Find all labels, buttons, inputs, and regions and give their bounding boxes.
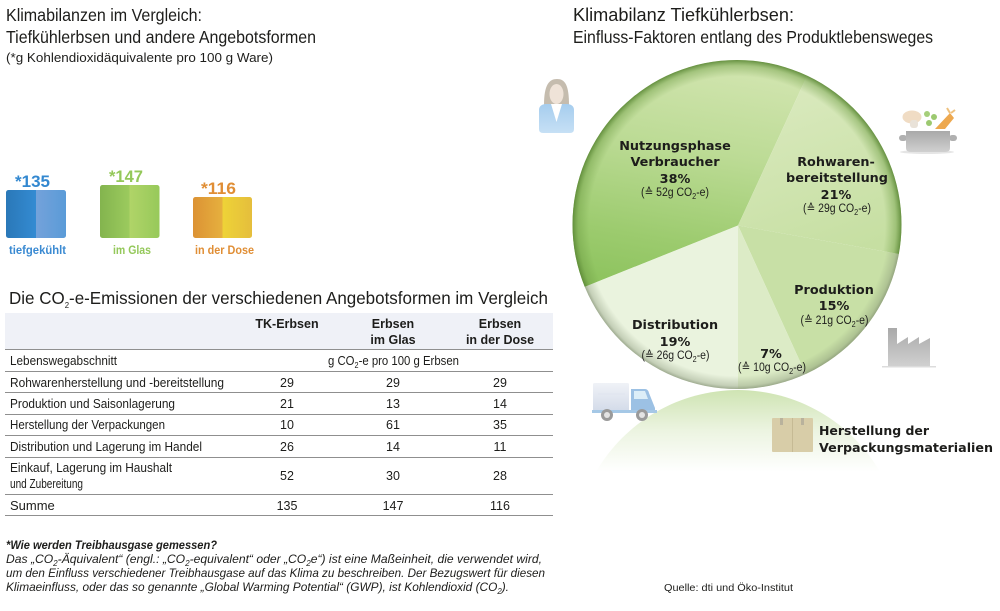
table: emissions by life cycle stage: Summe [10,498,55,513]
bar: im Glas [100,167,160,257]
icon: woman consumer [539,79,574,133]
title: right pie: Einfluss-Faktoren entlang des Produktlebensweges [573,27,933,47]
label: Verpackung 7% [738,347,806,376]
bar: tiefgekühlt: tiefgekühlt [9,243,66,257]
footnote: how greenhouse gases are measured: Das „CO [6,552,53,566]
pie chart: life cycle factors [572,60,902,389]
table: emissions by life cycle stage: und Zubereitung [10,476,83,491]
footnote: how greenhouse gases are measured: 2 [496,587,502,596]
table: emissions by life cycle stage: 26 [280,440,294,454]
slice: Produktion [738,226,899,374]
title: right pie [573,5,933,47]
label: Nutzungsphase: Nutzungsphase [619,139,731,154]
bar: tiefgekühlt: *135 [15,172,50,191]
footnote: how greenhouse gases are measured: -equivalent“ oder „CO [190,552,306,566]
table: emissions by life cycle stage: 2 [355,361,359,370]
label: Rohwarenbereitstellung [786,155,888,217]
label: Nutzungsphase: -e) [696,187,709,199]
label: Produktion: Produktion [794,283,874,298]
label: Rohwarenbereitstellung: bereitstellung [786,171,888,186]
table: emissions by life cycle stage: Produktion und Saisonlagerung [10,396,175,411]
label: Produktion [794,283,874,329]
slice: Herstellung Verpackung [738,226,806,389]
footnote: how greenhouse gases are measured [6,538,545,596]
label: Distribution: Distribution [632,318,718,333]
table: emissions by life cycle stage: Rohwarenherstellung und -bereitstellung [10,375,224,390]
label: Produktion: 15% [819,299,849,314]
table: emissions by life cycle stage: 116 [490,499,510,513]
label: Rohwarenbereitstellung: (≙ 29g CO [803,203,859,215]
label: Verpackung 7%: 7% [760,347,782,362]
table: emissions by life cycle stage: 147 [383,499,403,513]
icon: factory [882,328,936,368]
label: Herstellung der Verpackungsmaterialien: Verpackungsmaterialien [819,441,993,456]
footnote: how greenhouse gases are measured: 2 [184,559,190,568]
icon: delivery truck [592,383,657,421]
table heading: -e-Emissionen der verschiedenen Angebotsformen im Vergleich [69,288,548,308]
table: emissions by life cycle stage: 28 [493,469,507,483]
table: emissions by life cycle stage: g CO [328,354,357,368]
label: Nutzungsphase [619,139,731,201]
label: Verpackung 7%: 2 [789,367,794,376]
label: Distribution: (≙ 26g CO [642,350,698,362]
label: Rohwarenbereitstellung: 2 [854,208,859,217]
table: emissions by life cycle stage: 10 [280,418,294,432]
table: emissions by life cycle stage [5,313,553,516]
table: emissions by life cycle stage: Distribution und Lagerung im Handel [10,439,202,454]
table: emissions by life cycle stage: Lebenswegabschnitt [10,353,117,368]
footnote: how greenhouse gases are measured: -Äquivalent“ (engl.: „CO [58,552,185,566]
label: Nutzungsphase: 38% [660,172,690,187]
table: emissions by life cycle stage: 52 [280,469,294,483]
label: Verpackung 7%: -e) [793,362,806,374]
rim shading: lower part [584,252,899,389]
label: Nutzungsphase: (≙ 52g CO [641,187,697,199]
pie reflection [596,390,880,472]
table heading: 2 [65,301,70,310]
table heading: Die CO [9,288,66,308]
table: emissions by life cycle stage: 35 [493,418,507,432]
label: Rohwarenbereitstellung: 21% [821,188,851,203]
bar: tiefgekühlt [6,172,66,257]
table: emissions by life cycle stage: 14 [493,397,507,411]
footnote: how greenhouse gases are measured: Klimaeinfluss, oder das so genannte „Global Warming Potential“ (GWP), ist Kohlendioxid (CO [6,580,503,594]
label: Produktion: (≙ 21g CO [800,315,857,327]
label: Herstellung der Verpackungsmaterialien: Herstellung der [819,424,930,439]
label: Produktion: -e) [856,315,869,327]
table: emissions by life cycle stage: in der Dose [466,333,534,347]
footnote: how greenhouse gases are measured: um den Einfluss verschiedener Treibhausgase auf das Klima zu beschreiben. Der Bezugswert für diesen [6,566,545,580]
label: Nutzungsphase: Verbraucher [630,155,720,170]
label: Verpackung 7%: (≙ 10g CO [738,362,794,374]
table: emissions by life cycle stage: Erbsen [479,317,521,331]
rim shading: green part [572,60,902,287]
title: right pie: Klimabilanz Tiefkühlerbsen: [573,5,794,25]
table: emissions by life cycle stage: 61 [386,418,400,432]
table: emissions by life cycle stage: Herstellung der Verpackungen [10,417,165,432]
slice: Distribution [585,226,738,389]
title: left comparison: Klimabilanzen im Vergleich: [6,5,202,25]
table: emissions by life cycle stage: 13 [386,397,400,411]
footnote: how greenhouse gases are measured: ). [500,580,509,594]
table: emissions by life cycle stage: 135 [277,499,297,513]
bar: im Glas: im Glas [113,243,151,257]
slice: Rohwarenbereitstellung [738,76,902,254]
footnote: how greenhouse gases are measured: e“) ist eine Maßeinheit, die verwendet wird, [311,552,542,566]
label: Distribution: 19% [660,335,690,350]
label: Produktion: 2 [852,320,856,329]
table: emissions by life cycle stage: 14 [386,440,400,454]
table: emissions by life cycle stage: Erbsen [372,317,414,331]
icon: cooking pot with vegetables [899,108,957,154]
bar: in der Dose [193,179,254,257]
label: Rohwarenbereitstellung: -e) [858,203,871,215]
table: emissions by life cycle stage: 29 [493,376,507,390]
title: left comparison: (*g Kohlendioxidäquivalente pro 100 g Ware) [6,50,273,65]
label: Distribution [632,318,718,364]
table: emissions by life cycle stage: 30 [386,469,400,483]
bar: in der Dose: *116 [201,179,236,198]
title: left comparison [6,5,316,65]
footnote: how greenhouse gases are measured: 2 [52,559,58,568]
label: Herstellung der Verpackungsmaterialien [819,424,993,456]
source note: Quelle: dti und Öko-Institut [664,582,793,594]
slice: Nutzungsphase [572,60,807,287]
table: emissions by life cycle stage: -e pro 100 g Erbsen [359,354,459,368]
bar: in der Dose: in der Dose [195,243,254,257]
footnote: how greenhouse gases are measured: *Wie werden Treibhausgase gemessen? [6,538,218,552]
table: emissions by life cycle stage: 29 [280,376,294,390]
footnote: how greenhouse gases are measured: 2 [305,559,311,568]
table: emissions by life cycle stage: 11 [494,440,507,454]
table: emissions by life cycle stage: Einkauf, Lagerung im Haushalt [10,460,172,475]
label: Nutzungsphase: 2 [692,192,697,201]
icon: cardboard box [772,418,813,452]
table: emissions by life cycle stage: TK-Erbsen [255,317,319,331]
table: emissions by life cycle stage: 21 [280,397,294,411]
title: left comparison: Tiefkühlerbsen und andere Angebotsformen [6,27,316,47]
bar: im Glas: *147 [109,167,143,186]
label: Rohwarenbereitstellung: Rohwaren- [797,155,875,170]
table: emissions by life cycle stage: 29 [386,376,400,390]
label: Distribution: -e) [697,350,710,362]
label: Distribution: 2 [693,355,697,364]
bar chart: emissions per product form [6,167,254,257]
table: emissions by life cycle stage: im Glas [370,333,416,347]
